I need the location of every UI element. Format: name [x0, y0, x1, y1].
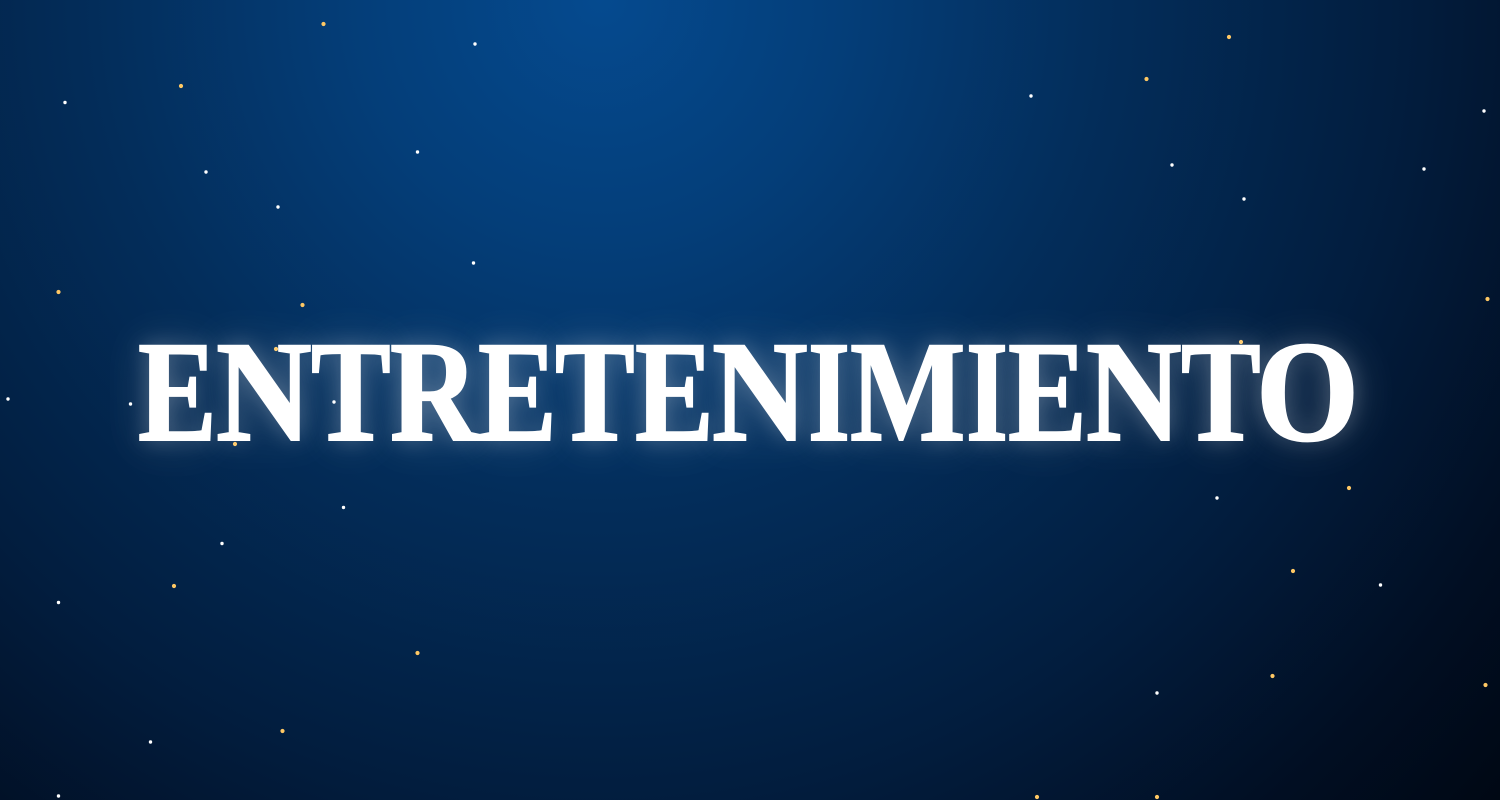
- title: N: [216, 313, 312, 472]
- title: T: [311, 313, 391, 472]
- title: N: [712, 313, 808, 472]
- title: E: [478, 313, 557, 472]
- title: E: [138, 313, 217, 472]
- title: M: [850, 313, 966, 472]
- title: E: [1008, 313, 1087, 472]
- title: I: [966, 313, 1008, 472]
- title: R: [390, 313, 478, 472]
- title: [130, 313, 1371, 472]
- title: T: [555, 313, 635, 472]
- title: I: [808, 313, 850, 472]
- title: T: [1181, 313, 1261, 472]
- title: O: [1256, 313, 1359, 472]
- title: N: [1086, 313, 1182, 472]
- title: E: [635, 313, 714, 472]
